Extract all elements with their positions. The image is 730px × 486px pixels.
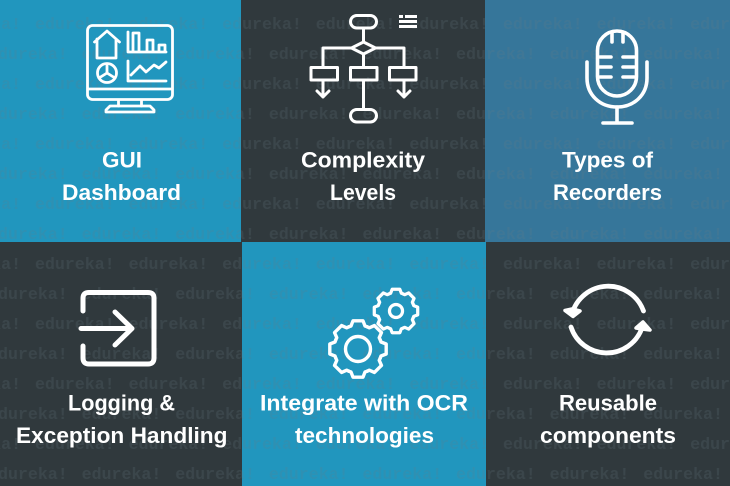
label: Logging and Exception Handling: Logging & [68,390,175,416]
label: GUI Dashboard: GUI [102,148,142,172]
panel: Types of Recorders background [485,0,730,242]
label: Integrate with OCR technologies: technologies [295,423,434,448]
icon: gears [330,289,418,377]
panel: Complexity Levels background [241,0,485,242]
label: Types of Recorders: Types of [562,148,654,172]
panel: GUI Dashboard background [0,0,241,242]
label: Logging and Exception Handling [16,390,228,448]
large gear [330,321,386,377]
label: Complexity Levels [301,148,426,205]
label: Complexity Levels: Levels [330,180,396,205]
label: Integrate with OCR technologies [260,390,468,448]
icon: exit arrow box [81,292,154,364]
panel: Reusable components background [486,242,730,486]
label: Logging and Exception Handling: Exception Handling [16,423,228,448]
panel: Integrate with OCR background [242,242,486,486]
label: Reusable components: Reusable [559,390,657,416]
label: Reusable components: components [540,423,676,448]
icon: microphone [587,31,647,123]
label: Complexity Levels: Complexity [301,148,426,172]
icon: monitor dashboard [88,26,172,112]
label: GUI Dashboard [62,148,181,205]
small gear [374,289,418,333]
panel: Logging and Exception Handling background [0,242,242,486]
label: Types of Recorders [553,148,662,205]
label: Reusable components [540,390,676,448]
icon: reuse cycle arrows [565,286,650,353]
label: Integrate with OCR technologies: Integrate with OCR [260,390,468,416]
label: GUI Dashboard: Dashboard [62,180,181,205]
label: Types of Recorders: Recorders [553,180,662,205]
icon: flowchart [311,16,416,122]
icon: list [399,15,417,28]
